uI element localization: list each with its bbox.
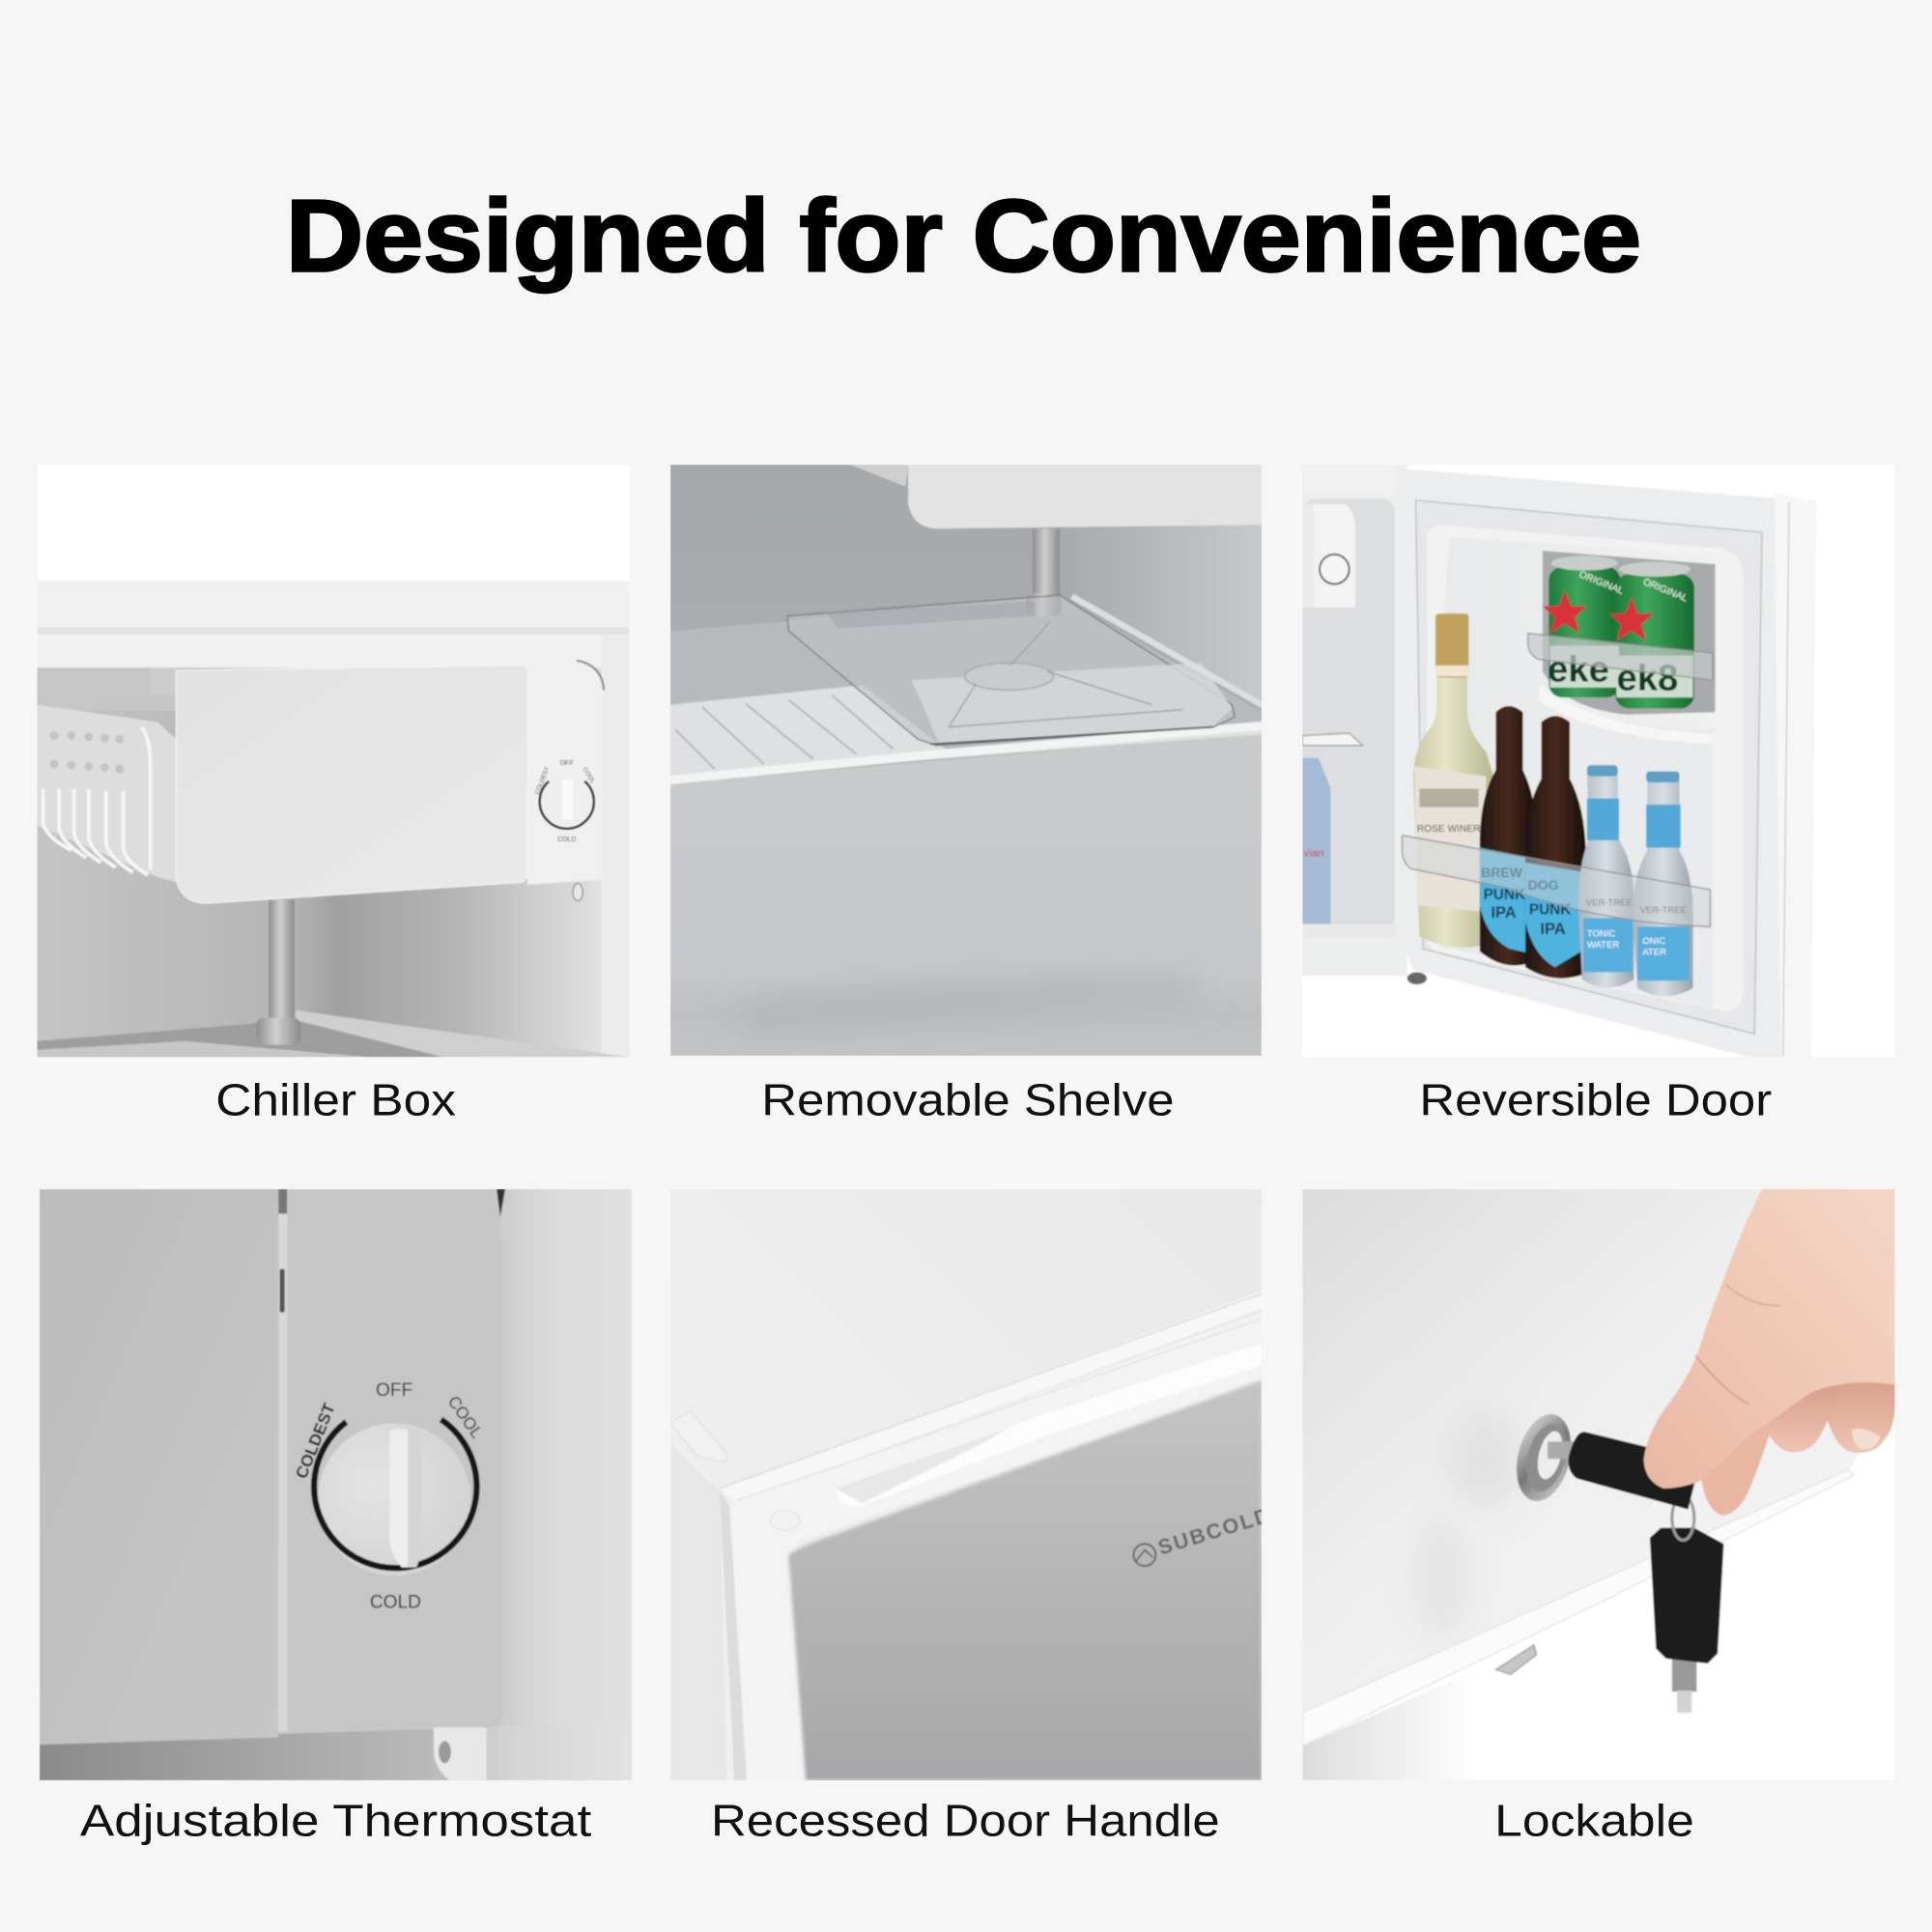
key ring (1672, 1495, 1694, 1540)
label: chiller box: Chiller Box (215, 1074, 456, 1124)
dial: OFF (376, 1380, 412, 1401)
chiller box door (176, 666, 527, 903)
wine bottle: ROSE WINERY (1417, 824, 1487, 835)
fridge face (1302, 1189, 1895, 1713)
label: lockable: Lockable (1494, 1796, 1694, 1846)
tonic bottle one: WATER (1587, 940, 1619, 951)
palm and thumb (1644, 1189, 1895, 1489)
lid seam (720, 1292, 1262, 1503)
bottom shade (40, 1725, 632, 1780)
beer bottle one (1480, 706, 1537, 965)
dial: COLD (370, 1593, 421, 1613)
support pole (269, 899, 295, 1023)
cans: ORIGINAL (1641, 577, 1690, 605)
label: adjustable thermostat: Adjustable Thermostat (80, 1796, 592, 1846)
logo: subcold: SUBCOLD (1155, 1502, 1274, 1559)
door front band (729, 1312, 1262, 1780)
wire shelf (670, 685, 1262, 780)
left side (670, 1444, 727, 1780)
door pin (770, 1511, 800, 1530)
upper rail (1528, 634, 1713, 680)
screw (573, 884, 582, 900)
chiller underside (908, 465, 1262, 528)
wine bottle (1413, 612, 1493, 948)
panel: adjustable thermostat (40, 1189, 632, 1780)
door liner (1427, 525, 1744, 1011)
tonic bottle one (1578, 765, 1634, 987)
dial: COLDEST (291, 1400, 339, 1481)
dial: OFF (560, 760, 574, 767)
label: removable shelve: Removable Shelve (761, 1074, 1175, 1124)
tonic bottle two: ATER (1642, 948, 1666, 958)
handle recess (836, 1343, 1262, 1507)
tonic bottle two: VER-TREE (1640, 905, 1687, 916)
dial (291, 1380, 487, 1613)
cans: ek8 (1616, 657, 1678, 698)
hanging key fob (1650, 1528, 1723, 1663)
ribbed tray (37, 705, 176, 882)
fridge top band (37, 581, 630, 671)
title: Designed for Convenience (286, 180, 1641, 294)
cans: eke (1548, 648, 1609, 690)
key tip (1672, 1658, 1696, 1713)
side wall (1112, 525, 1262, 708)
middle finger (1762, 1386, 1842, 1452)
screw (434, 1727, 487, 1780)
panel: recessed door handle (670, 1189, 1274, 1780)
beer bottle one: BREW (1481, 865, 1523, 880)
panel: removable shelf (670, 465, 1262, 1056)
glass tray (787, 595, 1235, 746)
index finger (1700, 1405, 1775, 1516)
label: reversible door: Reversible Door (1419, 1074, 1772, 1124)
door front (788, 1380, 1262, 1780)
latch (1495, 1645, 1537, 1674)
lower rail (1403, 836, 1710, 926)
lock cylinder (1508, 1408, 1579, 1507)
vertical corner highlight (1168, 739, 1173, 918)
tonic bottle one: VER-TREE (1586, 897, 1633, 908)
pole (1033, 528, 1060, 605)
fridge bottom band (1302, 1470, 1855, 1746)
panel: chiller box (37, 465, 630, 1057)
dial: COOL (444, 1392, 487, 1441)
panel: reversible door (1302, 465, 1895, 1057)
label: recessed door handle: Recessed Door Handle (711, 1796, 1220, 1846)
bottom-left floor shade (1302, 1669, 1479, 1780)
fridge interior: vian (1303, 847, 1324, 859)
hand (1644, 1189, 1895, 1516)
fridge interior (1302, 465, 1427, 984)
dial: COOL (582, 766, 596, 785)
dial: COLD (557, 837, 576, 843)
cabinet floor (37, 1010, 630, 1057)
left door panel (40, 1189, 278, 1745)
inserted key fob (1569, 1432, 1700, 1509)
lower cabinet (670, 729, 1262, 1056)
beer bottle two (1525, 716, 1586, 979)
beer bottle one: PUNK (1484, 887, 1525, 903)
door recess (1416, 500, 1762, 1034)
door shell (1396, 469, 1816, 1057)
dial (534, 760, 596, 843)
shelf surface (670, 621, 1262, 771)
cans: ORIGINAL (1577, 570, 1625, 597)
control panel (288, 1189, 502, 1734)
interior wall (37, 635, 630, 1057)
tonic bottle two: ONIC (1642, 936, 1665, 947)
gap (278, 1189, 287, 1731)
tonic bottle two (1633, 771, 1693, 996)
lower shadow (810, 977, 1180, 1009)
panel: lockable (1302, 1189, 1895, 1780)
upper pocket (1543, 551, 1716, 715)
right shelf lip (1072, 596, 1262, 705)
tonic bottle one: TONIC (1587, 928, 1615, 939)
beer bottle two: PUNK (1529, 901, 1571, 918)
top pad (670, 1410, 727, 1462)
beer bottle two: IPA (1540, 920, 1566, 938)
dial: COLDEST (534, 766, 552, 795)
control housing (527, 662, 603, 885)
lock shadow (1448, 1410, 1521, 1509)
beer bottle two: DOG (1528, 877, 1559, 893)
ring fingernail (1852, 1429, 1880, 1449)
ring finger (1824, 1380, 1895, 1453)
cans (1543, 555, 1694, 708)
beer bottle one: IPA (1491, 903, 1517, 922)
